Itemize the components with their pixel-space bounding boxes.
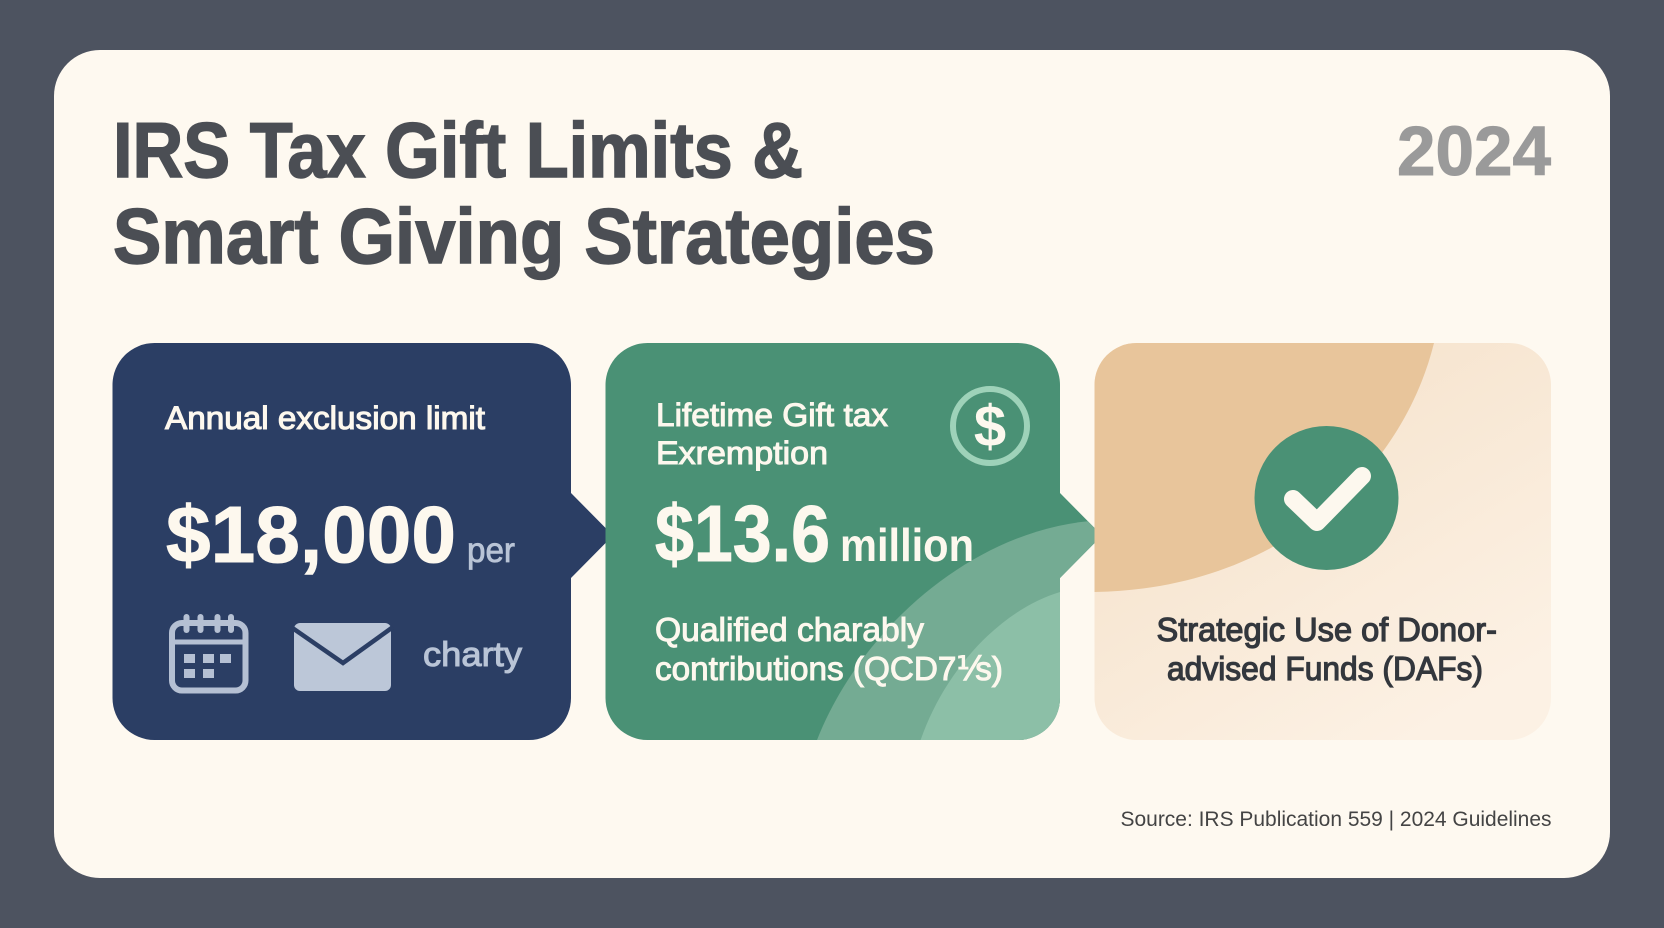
card heading: Exremption xyxy=(656,435,828,471)
icon: dollar coin xyxy=(953,389,1027,463)
charity label: charty xyxy=(423,636,522,674)
title: Smart Giving Strategies xyxy=(113,192,935,280)
year: 2024 xyxy=(1397,112,1551,190)
icon: check mark xyxy=(1254,426,1398,570)
card text xyxy=(1156,611,1497,687)
amount: $18,000 xyxy=(166,490,456,579)
qualified contributions text: Qualified charably xyxy=(655,611,924,648)
qualified contributions text: contributions (QCD7⅟s) xyxy=(655,650,1003,687)
million label: million xyxy=(840,519,974,571)
card text: Strategic Use of Donor- xyxy=(1156,611,1497,648)
card text: advised Funds (DAFs) xyxy=(1167,650,1483,687)
card heading: Annual exclusion limit xyxy=(165,400,485,436)
decorative inner band xyxy=(920,592,1060,740)
panel: annual exclusion limit xyxy=(112,343,613,740)
title xyxy=(113,106,935,280)
icon: calendar xyxy=(172,617,246,690)
card heading: Lifetime Gift tax xyxy=(656,397,888,433)
icon: envelope xyxy=(291,623,393,691)
decorative outer band xyxy=(817,521,1094,740)
source note: Source: IRS Publication 559 | 2024 Guidelines xyxy=(1120,808,1552,831)
card background with arrow xyxy=(112,343,613,740)
card heading xyxy=(656,397,888,471)
card background xyxy=(1094,343,1551,740)
qualified contributions text xyxy=(655,611,1003,687)
amount: $13.6 xyxy=(655,489,830,578)
title: IRS Tax Gift Limits & xyxy=(113,106,803,194)
per label: per xyxy=(467,531,515,570)
icon: dollar coin: $ xyxy=(974,394,1006,459)
decorative corner shape xyxy=(1094,330,1434,592)
panel: lifetime gift tax exemption xyxy=(606,343,1104,760)
panel: donor-advised funds xyxy=(1094,330,1551,740)
card background with arrow xyxy=(606,343,1102,740)
